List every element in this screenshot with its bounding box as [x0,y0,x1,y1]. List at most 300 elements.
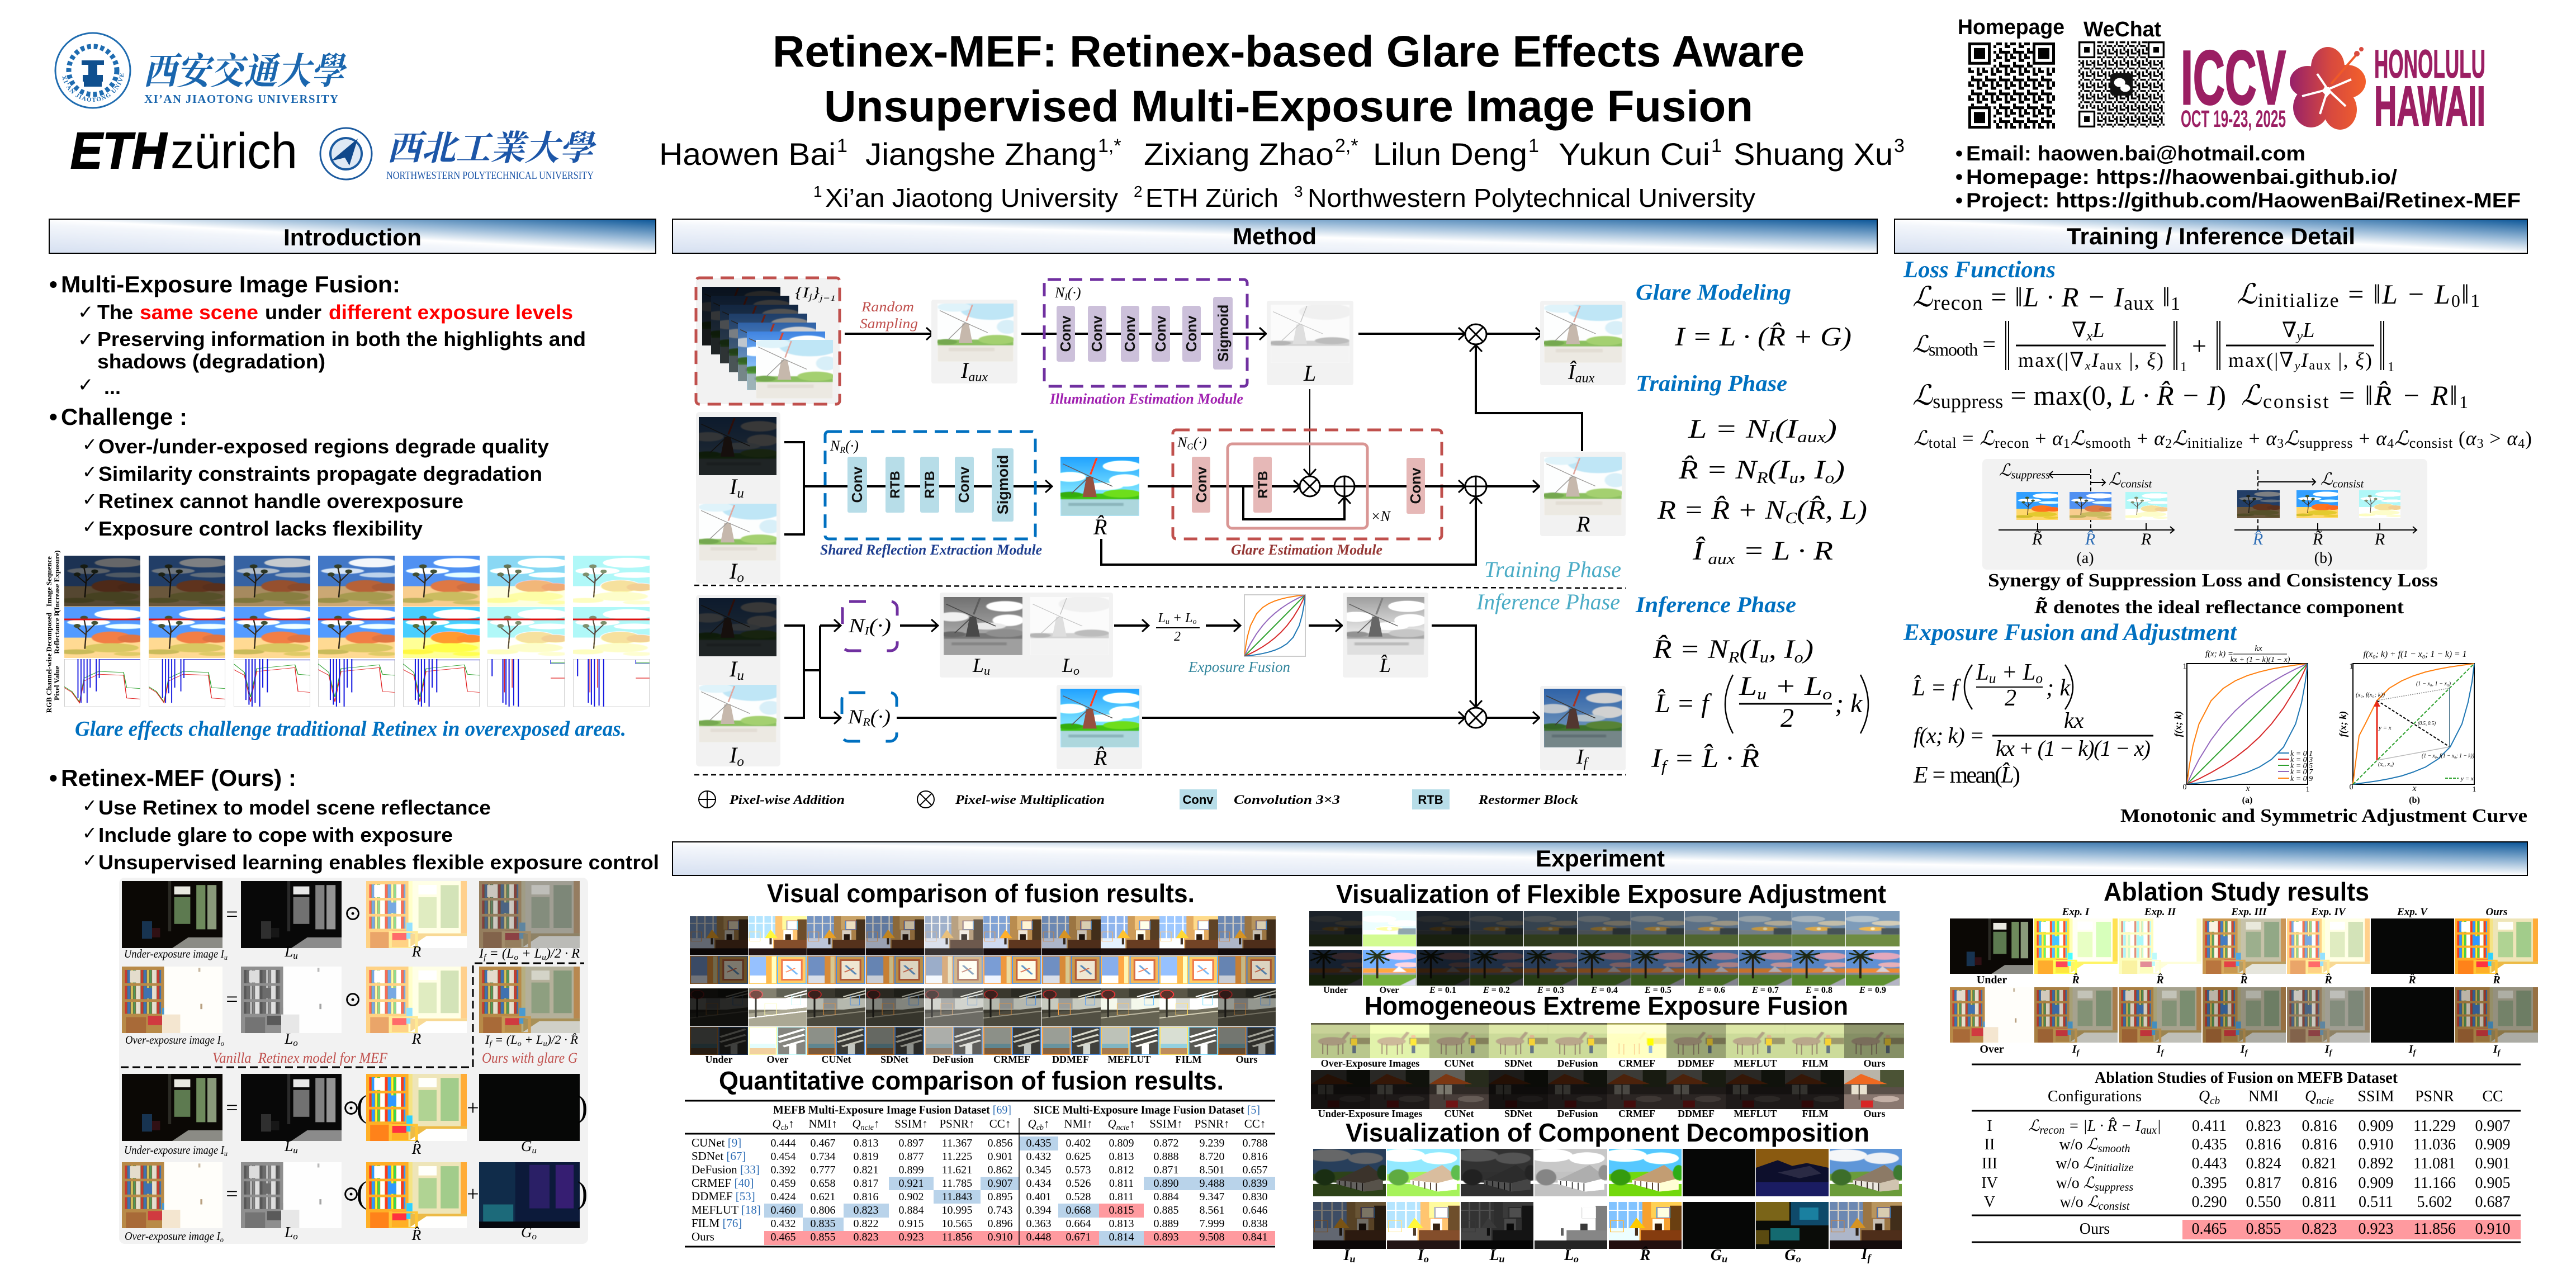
authors: Yukun Cui [1559,136,1710,172]
table headers: PSNR↑ [1194,1117,1230,1130]
formulas: inference phase: o [1822,686,1832,703]
fused labels: f [2245,1049,2248,1057]
figure: vanilla Retinex vs ours with glare: + L [522,1033,543,1046]
text: challenge: • [49,404,58,430]
ablation table: cb [2210,1095,2220,1107]
formulas: training phase: (I [1775,414,1799,444]
text: challenge: Challenge : [61,404,187,430]
ablation table: 0.435 [2191,1136,2227,1153]
ablation table: Q [2305,1088,2316,1105]
table values: 0.893 [1154,1231,1178,1243]
over-exposure labels: FILM [1802,1058,1829,1069]
authors: Jiangshe Zhang [865,136,1097,172]
chart: symmetric curve: 1 [2472,785,2476,794]
heading: Introduction [49,219,656,253]
text: challenge: Over-/under-exposed regions degrade quality [98,435,549,458]
figure: vanilla Retinex vs ours with glare: = [226,1096,238,1120]
formulas: inference phase: f [1661,758,1668,775]
formula: smooth loss: |, [2123,349,2146,371]
formula: smooth loss: smooth [1929,339,1978,359]
formula: total loss: suppress [2299,435,2352,451]
image: R hat [1054,457,1141,539]
table values: 0.401 [1026,1191,1051,1203]
palm exposure row [1309,950,1904,986]
heading: Training / Inference Detail: Training / Inference Detail [2067,223,2355,249]
ablation table: initialize [2095,1162,2134,1174]
table values: 0.788 [1242,1137,1268,1149]
formula: f of x [1914,708,2153,761]
table values: 0.884 [899,1204,924,1216]
ablation table: consist [2099,1200,2130,1213]
formula: smooth loss: 1 [2180,360,2187,375]
inference inputs: u [737,668,744,683]
figure: vanilla Retinex vs ours with glare: L [285,1224,293,1240]
text: challenge: ✓ [82,434,97,455]
table values: 0.885 [1154,1204,1178,1216]
reflectance labels: R̂ [2492,973,2501,986]
image: I f: f [1584,756,1589,770]
component labels: G [1711,1247,1722,1264]
table values: 0.460 [770,1204,796,1216]
ablation table: | [2157,1117,2161,1135]
ablation table: 0.816 [2246,1136,2281,1153]
images: L u and L o [937,593,1113,678]
ablation table: 0.821 [2302,1155,2337,1172]
text: challenge: ✓ [82,461,97,482]
formula: smooth loss: |, [2332,349,2355,371]
table headers: ↑ [788,1117,794,1130]
table values: 0.743 [987,1204,1013,1216]
formula: total loss: ℒ [2172,427,2187,449]
formulas: training phase [1636,371,1867,568]
figure: vanilla Retinex vs ours with glare: G [521,1138,532,1154]
fused labels: I [2072,1043,2077,1055]
reflectance labels: R̂ [2156,973,2164,986]
fraction: average illumination: 2 [1174,629,1181,644]
ablation table: 0.823 [2246,1117,2281,1135]
method labels: SDNet [880,1054,908,1065]
glare estimation module: N [1177,434,1187,451]
exposure labels: E = 0.2 [1483,986,1510,995]
caption: adjustment curve: Monotonic and Symmetric Adjustment Curve [2120,806,2527,826]
figure: vanilla Retinex vs ours with glare: )/2 · R̂ [546,1033,579,1046]
figure: vanilla Retinex vs ours with glare: o [221,1040,224,1048]
text: multi-exposure image fusion: Multi-Exposure Image Fusion: [61,271,400,297]
inputs I u and I o: I [730,558,737,584]
formulas: training phase: (I [1768,455,1791,485]
table values: 0.573 [1066,1164,1091,1176]
formula: total loss: = [1957,427,1979,449]
experiment labels: Exp. I [2062,906,2090,918]
formula: smooth loss: + [2192,332,2206,360]
text: multi-exposure image fusion: ✓ [78,374,94,396]
ablation table: 0.816 [2302,1117,2337,1135]
formula: L hat: u [1989,670,1996,686]
ablation table: 0.909 [2475,1136,2510,1153]
ablation table: 5.602 [2417,1194,2452,1211]
figure: vanilla Retinex vs ours with glare [119,878,588,1244]
exposure labels: Under [1323,986,1348,995]
table values: 0.862 [987,1164,1013,1176]
table values: 0.823 [853,1204,879,1216]
figure: vanilla Retinex vs ours with glare: ⊙ [342,1096,360,1120]
figure: vanilla Retinex vs ours with glare: Under-exposure image I [124,947,238,960]
ablation table: 0.855 [2246,1220,2281,1238]
image: L hat [1341,593,1428,678]
formula: suppress loss: ℒ [1912,380,1933,411]
component labels: I [1344,1247,1349,1264]
section: component decomposition: Visualization of Component Decomposition [1346,1118,1869,1147]
table values: 0.454 [770,1150,796,1163]
exposure fusion curve: Exposure Fusion [1188,659,1290,675]
table row labels [692,1136,761,1243]
figure: vanilla Retinex vs ours with glare: )/2 · R [545,946,580,961]
method labels: CRMEF [993,1054,1030,1065]
fused labels: f [2413,1049,2417,1057]
over-exposure labels: DDMEF [1678,1058,1715,1069]
legend: Pixel-wise Addition [729,793,845,807]
formulas: training phase: R̂ = N [1679,455,1745,485]
contact list: Homepage: https://haowenbai.github.io/ [1966,165,2397,188]
case a: (a) [2076,550,2094,567]
formulas: inference phase: + L [1767,671,1822,701]
heading: Exposure Fusion and Adjustment: Exposure Fusion and Adjustment [1903,620,2237,646]
case a [1999,461,2174,567]
case a: ℒ [2109,470,2121,489]
formula: total loss: smooth [2086,435,2131,451]
image: R hat: R̂ [1093,514,1107,539]
ablation table: III [1982,1155,1997,1172]
image: I f [1538,686,1626,770]
chart: symmetric curve: (x₀, f(x₀; k)) [2356,692,2385,698]
table values: 0.921 [899,1177,924,1190]
table values: 0.822 [853,1218,879,1230]
formula: total loss: 4 [2518,437,2525,451]
logo: Northwestern Polytechnical University: 西北工業大學 [387,120,596,170]
logo: Xi'an Jiaotong University: XI’AN JIAOTONG UNIVERSITY [144,92,338,106]
formulas: inference phase: u [1760,649,1769,666]
table values: 0.363 [1026,1218,1051,1230]
affiliations: 1 [813,183,822,200]
ablation table: 0.905 [2475,1175,2510,1192]
table row labels: DeFusion [33] [692,1163,760,1176]
ablation table: 0.816 [2302,1136,2337,1153]
legend: Convolution 3×3 [1234,793,1340,807]
chart: symmetric curve: (x₀, x₀) [2378,761,2394,768]
inputs I u and I o [693,412,784,585]
inference inputs [693,595,784,769]
chart: adjustment curves by k [2172,644,2313,805]
table values: 0.877 [899,1150,924,1163]
contact list: • [1955,189,1963,212]
text: multi-exposure image fusion: ✓ [78,329,94,351]
formula: total loss: α [2154,427,2165,449]
glare estimation module: (·) [1194,434,1207,451]
arrow [1114,624,1148,627]
text: challenge [49,404,549,540]
image: R hat inference: R̂ [1093,746,1107,770]
ablation table: ncie [2316,1095,2334,1107]
ablation table: 0.909 [2358,1175,2394,1192]
legend [699,789,1579,809]
text: Retinex-MEF ours [49,765,659,874]
inference inputs: o [737,754,744,769]
exposure labels: E = 0.9 [1859,986,1886,995]
ablation table: 0.816 [2302,1175,2337,1192]
figure: vanilla Retinex vs ours with glare: R̂ [411,1227,422,1243]
logo: ETH Zurich [70,122,297,179]
panel: experiment [673,842,2538,1265]
over-exposure row [1311,1023,1904,1058]
shared reflection extraction module: (·) [845,438,859,454]
shared reflection extraction module: RTB [922,471,937,499]
case b: R [2374,530,2385,548]
under-exposure labels: CRMEF [1618,1108,1655,1119]
section: homogeneous extreme exposure [1311,991,1904,1119]
figure: vanilla Retinex vs ours with glare: u [293,950,298,961]
QR WeChat [2078,18,2165,127]
formulas: inference phase: L̂ = f [1655,688,1712,718]
table values: 0.823 [853,1231,879,1243]
ablation table: 0.817 [2246,1175,2281,1192]
table values: 0.646 [1242,1204,1268,1216]
exposure labels: E = 0.8 [1805,986,1832,995]
ablation table: ℒ [2028,1117,2039,1135]
authors: 1 [837,135,847,157]
under-exposure labels: SDNet [1504,1108,1532,1119]
formula: smooth loss: I [2300,349,2309,371]
table values: 0.444 [770,1137,796,1149]
formulas: inference phase: = L̂ · R̂ [1666,743,1759,773]
section: homogeneous extreme exposure: Homogeneous Extreme Exposure Fusion [1365,991,1848,1020]
ablation table: II [1985,1136,1995,1153]
formula: smooth loss: ξ) [2147,349,2163,371]
formula: total loss: α [2466,427,2476,449]
figure: vanilla Retinex vs ours with glare: f [484,953,487,962]
figure: vanilla Retinex vs ours with glare: o [518,1040,522,1048]
affiliations: ETH Zürich [1145,183,1278,212]
component labels: G [1784,1247,1796,1264]
table values: 0.813 [1109,1218,1134,1230]
figure: vanilla Retinex vs ours with glare: ) [577,1176,588,1210]
fused labels [1980,1043,2501,1057]
living room components [1313,1202,1902,1249]
formula: L hat: L̂ = f [1912,675,1961,701]
figure: vanilla Retinex vs ours with glare: ) [577,1090,588,1124]
fused labels: f [2161,1049,2165,1057]
authors: 2,* [1335,135,1358,157]
image: I hat aux: Î [1568,361,1575,384]
text: multi-exposure image fusion: • [49,271,58,297]
component labels: R̂ [1640,1246,1650,1264]
affiliations [813,183,1755,212]
formula: L hat: o [2035,670,2043,686]
table values: 0.923 [899,1231,924,1243]
component labels: f [1867,1252,1872,1263]
glare estimation module: Conv [1407,467,1424,504]
figure: vanilla Retinex vs ours with glare: L [285,1138,293,1154]
formula: f of x: f(x; k) = [1914,723,1985,748]
formulas: inference phase: ) [1801,634,1813,664]
glare estimation module: Conv [1193,466,1210,503]
fused labels: f [2329,1049,2333,1057]
table headers: SSIM↑ [894,1117,928,1130]
glare estimation module: ×N [1371,508,1391,524]
table values: 0.459 [770,1177,796,1190]
input image stack: } [812,285,820,301]
multiplication node [1465,708,1539,728]
chart: symmetric curve: 1 [2349,662,2354,671]
over-exposure labels: MEFLUT [1734,1058,1777,1069]
table row labels: MEFLUT [18] [692,1203,761,1216]
chart: adjustment curves by k: 1 [2182,662,2187,671]
formulas: training phase: Î [1693,536,1702,566]
method labels: Over [767,1054,788,1065]
formulas: inference phase: R [1728,649,1739,666]
under-exposure labels [1318,1108,1886,1119]
text: Retinex-MEF ours: ✓ [82,822,97,844]
image: I hat aux [1540,300,1630,386]
table values: 0.809 [1109,1137,1134,1149]
figure: exposure sequence with reflectance and pixel plots: Decomposed [45,612,53,652]
ablation table: recon [2039,1124,2064,1137]
table values: 10.565 [941,1218,973,1230]
panel: method [673,219,1877,809]
ablation table: 0.443 [2191,1155,2227,1172]
formulas: training phase: (R̂, L) [1797,495,1867,525]
case b: R̂ [2252,530,2263,548]
contact block: QR codes, ICCV logo and links [1955,16,2521,212]
formula: smooth loss: L [2302,319,2314,342]
component labels: o [1424,1253,1429,1265]
table values: 0.813 [853,1137,879,1149]
figure: vanilla Retinex vs ours with glare: ⊙ [344,902,362,925]
table values: 0.814 [1109,1231,1134,1243]
formulas: training phase: aux [1703,551,1735,568]
shared reflection extraction module: N [830,438,840,454]
image: I hat aux: aux [1575,371,1595,386]
formulas: training phase: o [1825,470,1834,487]
ablation table: w/o ℒ [2056,1175,2095,1192]
table headers: CC↑ [989,1117,1011,1130]
exposure labels: E = 0.4 [1590,986,1618,995]
table values: 7.999 [1200,1218,1224,1230]
exposure fusion curve [1188,595,1305,675]
images: L u and L o: L [973,654,984,676]
formula: L hat: L [1976,660,1989,685]
illumination estimation module: I [1064,292,1068,302]
formula: f of x: kx + (1 − k)(1 − x) [1996,736,2151,761]
sunset exposure row [1308,911,1904,946]
under-exposure row [1311,1070,1904,1109]
formulas: inference phase: , I [1769,634,1796,664]
exposure labels: E = 0.6 [1698,986,1725,995]
QR homepage: Homepage [1958,16,2064,39]
authors: Haowen Bai [659,136,836,172]
reflectance labels: R̂ [2071,973,2080,986]
illumination estimation module [1021,280,1266,407]
formula: total loss: 2 [2165,437,2172,451]
figure: vanilla Retinex vs ours with glare: L [285,1030,293,1047]
chart: symmetric curve: y = x [2378,724,2392,731]
illumination estimation module: Conv [1183,315,1200,352]
table values: 0.432 [770,1218,796,1230]
figure: vanilla Retinex vs ours with glare: Under-exposure image I [124,1143,238,1157]
component labels: u [1722,1253,1727,1265]
illumination estimation module: N [1055,285,1064,301]
chart: symmetric curve: y = x [2460,775,2474,782]
reflectance labels [1977,973,2501,986]
table values: 0.888 [1154,1150,1178,1163]
ablation table: 0.824 [2246,1155,2281,1172]
figure: vanilla Retinex vs ours with glare: u [543,1040,547,1048]
section: flexible exposure adjustment [1308,879,1904,995]
image: L hat: L̂ [1379,654,1391,676]
fused labels: I [2325,1043,2329,1055]
table values: 0.528 [1066,1191,1091,1203]
ablation table: 11.081 [2413,1155,2456,1172]
images: L u and L o: u [984,664,990,678]
formula: total loss: ℒ [2071,427,2086,449]
exposure labels: E = 0.5 [1644,986,1671,995]
figure: vanilla Retinex vs ours with glare: R̂ [411,1140,422,1157]
figure: vanilla Retinex vs ours with glare: + L [518,946,542,961]
text: multi-exposure image fusion: ... [104,376,121,399]
fused row [1950,987,2538,1043]
method labels: Under [705,1054,733,1065]
authors: Zixiang Zhao [1144,136,1334,172]
formulas: training phase: R [1756,470,1768,487]
image: I aux: I [961,358,968,383]
chart: symmetric curve: (0.5, 0.5) [2418,720,2436,727]
formula: initialize loss: L − L [2382,278,2450,310]
formula: total loss: > [2484,427,2506,449]
table values: 0.448 [1026,1231,1051,1243]
chart: symmetric curve: f(x₀; k) + f(1 − x₀; 1 − k) = 1 [2364,650,2466,659]
under-exposure labels: Under-Exposure Images [1318,1108,1422,1119]
component labels: I [1862,1246,1867,1263]
line [897,717,1465,719]
text: Retinex-MEF ours: Unsupervised learning enables flexible exposure control [98,851,659,874]
illumination estimation module: Conv [1057,315,1074,352]
method labels: DeFusion [932,1054,974,1065]
method labels: Ours [1235,1054,1258,1065]
formula: smooth loss: max(|∇ [2018,349,2083,371]
table values: 0.839 [1242,1177,1268,1190]
text: challenge: Retinex cannot handle overexposure [98,490,463,513]
formulas: training phase: L = N [1688,414,1752,444]
images: L u and L o: L [1062,654,1073,676]
authors: 3 [1894,135,1905,157]
chart: adjustment curves by k: kx [2255,644,2262,653]
text: multi-exposure image fusion: same scene [140,301,258,324]
formula: total loss: ℒ [2394,427,2409,449]
fraction: average illumination: u [1166,618,1169,626]
line to multiplication [1432,626,1476,707]
component labels: u [1499,1253,1505,1265]
ablation table: smooth [2098,1143,2130,1155]
formula: consist loss: 1 [2459,392,2468,412]
figure: vanilla Retinex vs ours with glare: u [224,954,228,962]
figure: vanilla Retinex vs ours with glare: ⊙ [342,1182,360,1206]
section: visual comparison [690,879,1276,1065]
inputs I u and I o: u [737,486,744,501]
formulas: inference phase: R̂ = N [1653,634,1719,664]
formula: initialize loss: = ‖ [2340,278,2381,310]
chart: symmetric curve [2337,650,2476,805]
table headers: ncie [861,1124,874,1132]
chart: adjustment curves by k: k = 0.5 [2290,762,2313,770]
